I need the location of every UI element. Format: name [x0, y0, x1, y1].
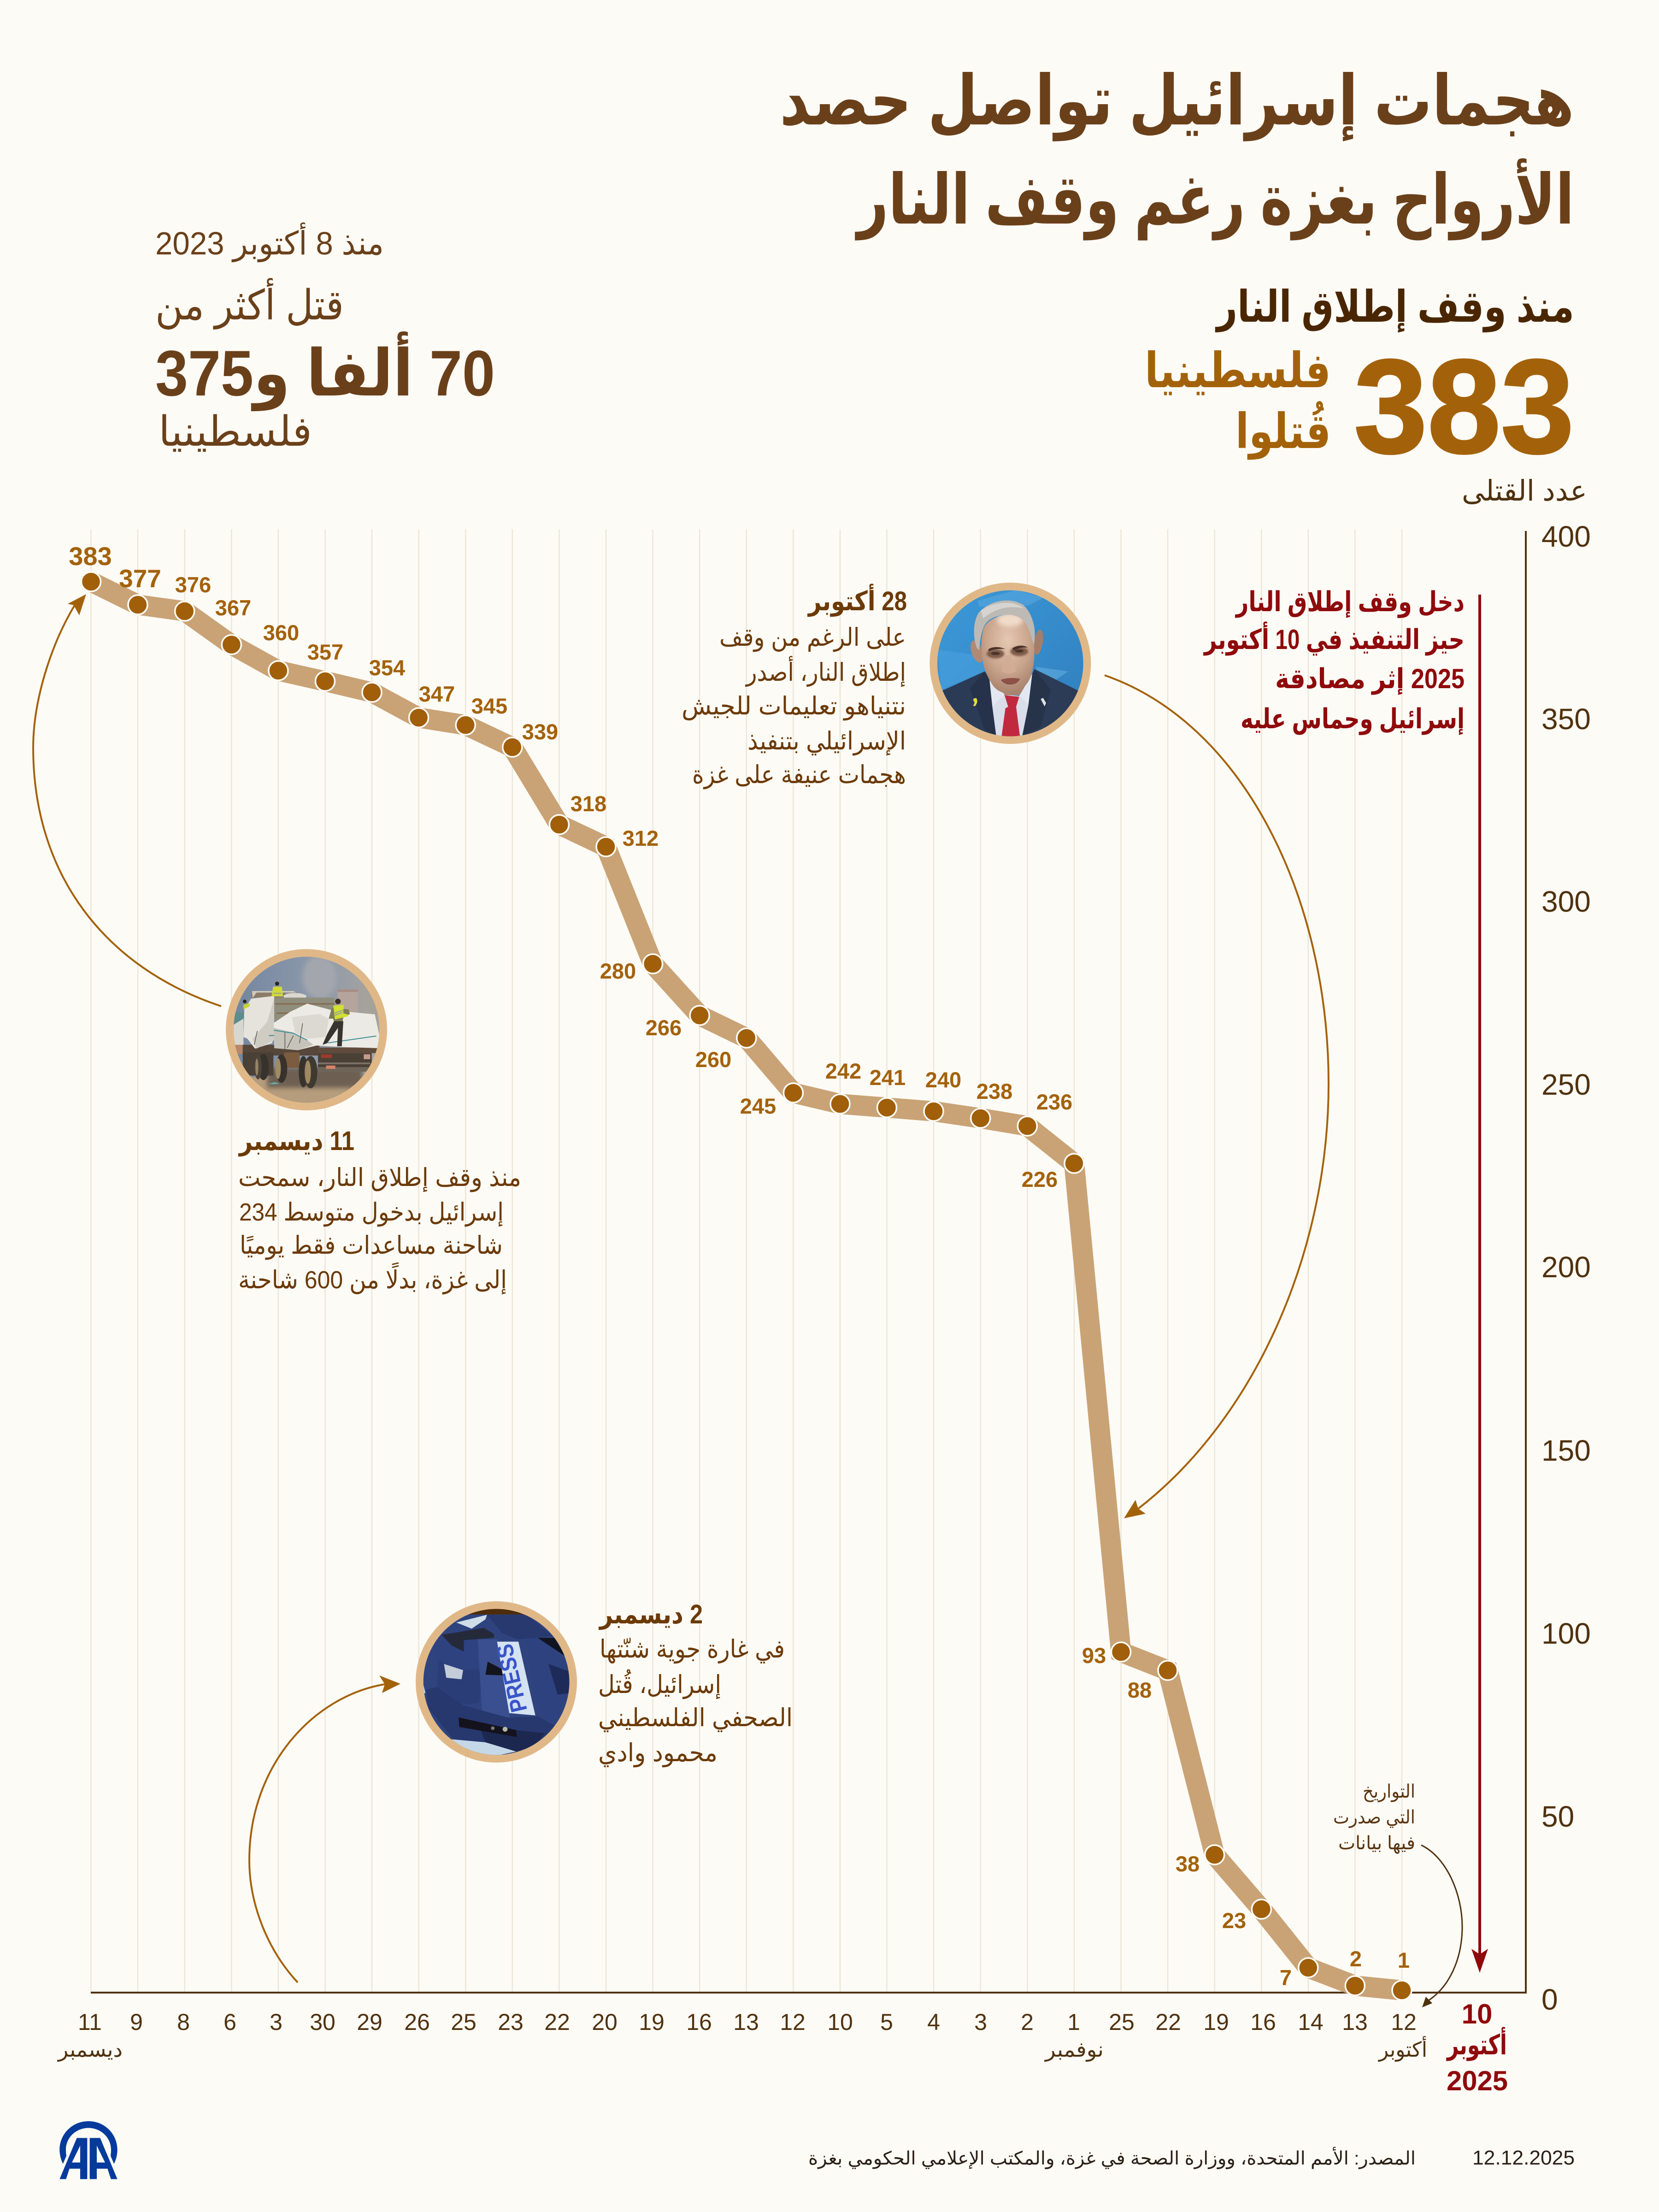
stat: since ceasefire: قُتلوا [1235, 401, 1331, 460]
x axis labels: 16 [1250, 2009, 1276, 2035]
data values: 242 [825, 1059, 861, 1083]
x axis labels: 23 [498, 2009, 524, 2035]
data values: 236 [1036, 1090, 1072, 1114]
ceasefire note [1203, 586, 1465, 735]
photo: aid truck [226, 949, 387, 1110]
photo: press vest [416, 1601, 577, 1763]
x axis labels: 25 [451, 2009, 477, 2035]
axes [91, 531, 1526, 1993]
callout: 2 December: في غارة جوية شنّتها [600, 1635, 785, 1663]
arrow: press vest [249, 1675, 400, 1982]
ceasefire note: حيز التنفيذ في 10 أكتوبر [1203, 621, 1465, 656]
callout: 11 December: إلى غزة، بدلًا من 600 شاحنة [238, 1262, 507, 1294]
data values: 345 [471, 694, 507, 718]
data values: 38 [1176, 1852, 1200, 1876]
note: dates of data: فيها بيانات [1338, 1833, 1415, 1854]
data values [69, 542, 1410, 1990]
note: dates of data: التواريخ [1363, 1781, 1415, 1802]
x axis labels: 1 [1067, 2009, 1080, 2035]
data values: 245 [740, 1094, 776, 1118]
x axis labels: 22 [544, 2009, 570, 2035]
callout: 28 October: نتنياهو تعليمات للجيش [682, 692, 906, 720]
x axis labels: 30 [310, 2009, 335, 2035]
x axis labels: 16 [686, 2009, 712, 2035]
callout: 2 December: محمود وادي [598, 1739, 718, 1767]
y axis labels: 400 [1541, 520, 1591, 553]
data values: 383 [69, 542, 112, 571]
x axis labels: 8 [177, 2009, 190, 2035]
callout: 11 December: إسرائيل بدخول متوسط 234 [239, 1198, 504, 1227]
stat: since October 2023: 70 ألفا و375 [155, 331, 495, 412]
data values: 238 [977, 1079, 1012, 1103]
stat: since ceasefire: 383 [1354, 332, 1574, 481]
data values: 2 [1350, 1947, 1362, 1971]
note: dates of data: التي صدرت [1333, 1807, 1415, 1828]
x axis labels: 9 [130, 2009, 143, 2035]
y axis labels: 100 [1541, 1617, 1591, 1650]
arrow: aid truck to 383 [33, 594, 221, 1006]
stat: since October 2023 [155, 222, 495, 455]
data values: 93 [1082, 1643, 1106, 1668]
callout: 2 December: 2 ديسمبر [598, 1599, 703, 1630]
x axis labels: 25 [1109, 2009, 1135, 2035]
y axis labels: 0 [1541, 1983, 1558, 2016]
title [780, 62, 1574, 241]
x axis labels: 3 [270, 2009, 282, 2035]
arrow: Netanyahu to line [1105, 675, 1329, 1518]
callout: 28 October: هجمات عنيفة على غزة [692, 761, 906, 789]
x axis labels: 11 [78, 2009, 102, 2035]
callout: 11 December: 11 ديسمبر [238, 1126, 354, 1157]
x axis labels: 3 [974, 2009, 987, 2035]
ceasefire note: إسرائيل وحماس عليه [1241, 703, 1465, 735]
data values: 280 [600, 959, 636, 983]
line chart: deaths [69, 542, 1412, 2000]
stat: since October 2023: منذ 8 أكتوبر 2023 [155, 222, 384, 262]
y axis labels: 250 [1541, 1068, 1591, 1101]
x axis labels: 12 [1391, 2009, 1417, 2035]
y axis labels: 150 [1541, 1434, 1591, 1467]
photo: press vest: PRESS [491, 1641, 532, 1715]
ceasefire date [1446, 1999, 1508, 2096]
workers [243, 982, 350, 1046]
callout: 2 December: الصحفي الفلسطيني [598, 1704, 793, 1732]
callout: 2 December: إسرائيل، قُتل [598, 1669, 721, 1699]
data values: 266 [646, 1015, 682, 1040]
x axis labels: 22 [1155, 2009, 1181, 2035]
callout: 2 December [598, 1599, 793, 1767]
x axis labels: 19 [1203, 2009, 1229, 2035]
data values: 1 [1398, 1948, 1410, 1972]
x axis labels [78, 2009, 1417, 2035]
data values: 88 [1128, 1678, 1152, 1702]
note: dates of data [1333, 1781, 1415, 1854]
callout: 28 October [682, 584, 907, 789]
data values: 376 [175, 572, 211, 597]
y axis labels: 350 [1541, 702, 1591, 736]
data values: 357 [307, 640, 343, 664]
x axis labels: 10 [827, 2009, 853, 2035]
y axis labels: 200 [1541, 1251, 1591, 1284]
stat: since ceasefire: منذ وقف إطلاق النار [1215, 283, 1574, 333]
data values: 226 [1022, 1167, 1058, 1192]
callout: 28 October: الإسرائيلي بتنفيذ [747, 727, 906, 755]
data values: 367 [215, 596, 251, 620]
data values: 7 [1280, 1965, 1292, 1990]
x axis labels: 13 [733, 2009, 759, 2035]
callout: 11 December: شاحنة مساعدات فقط يوميًا [240, 1232, 503, 1260]
date: 12.12.2025 [1472, 2147, 1575, 2169]
ceasefire date: أكتوبر [1446, 2027, 1507, 2061]
y axis labels [1541, 520, 1591, 2016]
stat: since October 2023: فلسطينيا [159, 409, 312, 455]
arrow: dates note [1421, 1845, 1462, 2007]
stat: since October 2023: قتل أكثر من [155, 278, 344, 330]
month labels: أكتوبر [1378, 2036, 1427, 2062]
arrow: ceasefire period [1471, 595, 1488, 1973]
x axis labels: 29 [357, 2009, 382, 2035]
data values: 347 [419, 682, 455, 706]
data values: 318 [571, 791, 606, 816]
photo: Netanyahu [930, 583, 1091, 744]
data values: 354 [369, 655, 405, 680]
x axis labels: 5 [880, 2009, 893, 2035]
x axis labels: 26 [404, 2009, 430, 2035]
data values: 312 [623, 826, 659, 850]
callout: 11 December: منذ وقف إطلاق النار، سمحت [238, 1164, 521, 1192]
ceasefire note: 2025 إثر مصادقة [1275, 663, 1465, 695]
x axis labels: 20 [592, 2009, 618, 2035]
ceasefire date: 2025 [1447, 2065, 1508, 2096]
callout: 28 October: إطلاق النار، أصدر [745, 656, 906, 687]
data values: 360 [263, 620, 299, 645]
chart grid lines [91, 529, 1402, 1993]
data values: 377 [119, 564, 161, 593]
x axis labels: 6 [224, 2009, 236, 2035]
callout: 28 October: على الرغم من وقف [719, 624, 906, 652]
data values: 339 [522, 720, 558, 744]
data values: 241 [870, 1065, 906, 1090]
x axis labels: 19 [639, 2009, 665, 2035]
stat: since ceasefire [1145, 283, 1574, 481]
month labels: ديسمبر [57, 2038, 123, 2062]
ceasefire note: دخل وقف إطلاق النار [1235, 586, 1465, 618]
callout: 11 December [238, 1126, 521, 1294]
data values: 240 [925, 1068, 961, 1092]
x axis labels: 2 [1021, 2009, 1034, 2035]
source: المصدر: الأمم المتحدة، ووزارة الصحة في غزة، والمكتب الإعلامي الحكومي بغزة [808, 2147, 1416, 2169]
ceasefire date: 10 [1462, 1999, 1492, 2029]
x axis labels: 13 [1342, 2009, 1368, 2035]
x axis labels: 12 [780, 2009, 806, 2035]
data values: 23 [1222, 1908, 1246, 1933]
month labels: نوفمبر [1044, 2038, 1104, 2062]
x axis labels: 4 [927, 2009, 940, 2035]
data points [81, 572, 1412, 2000]
AA logo [59, 2121, 118, 2179]
y axis labels: 50 [1541, 1800, 1574, 1833]
month labels [57, 2036, 1427, 2062]
y axis title: عدد القتلى [1462, 475, 1587, 507]
data values: 260 [695, 1047, 731, 1072]
y axis labels: 300 [1541, 885, 1591, 918]
callout: 28 October: 28 أكتوبر [807, 584, 907, 617]
stat: since ceasefire: فلسطينيا [1145, 344, 1331, 398]
x axis labels: 14 [1298, 2009, 1324, 2035]
